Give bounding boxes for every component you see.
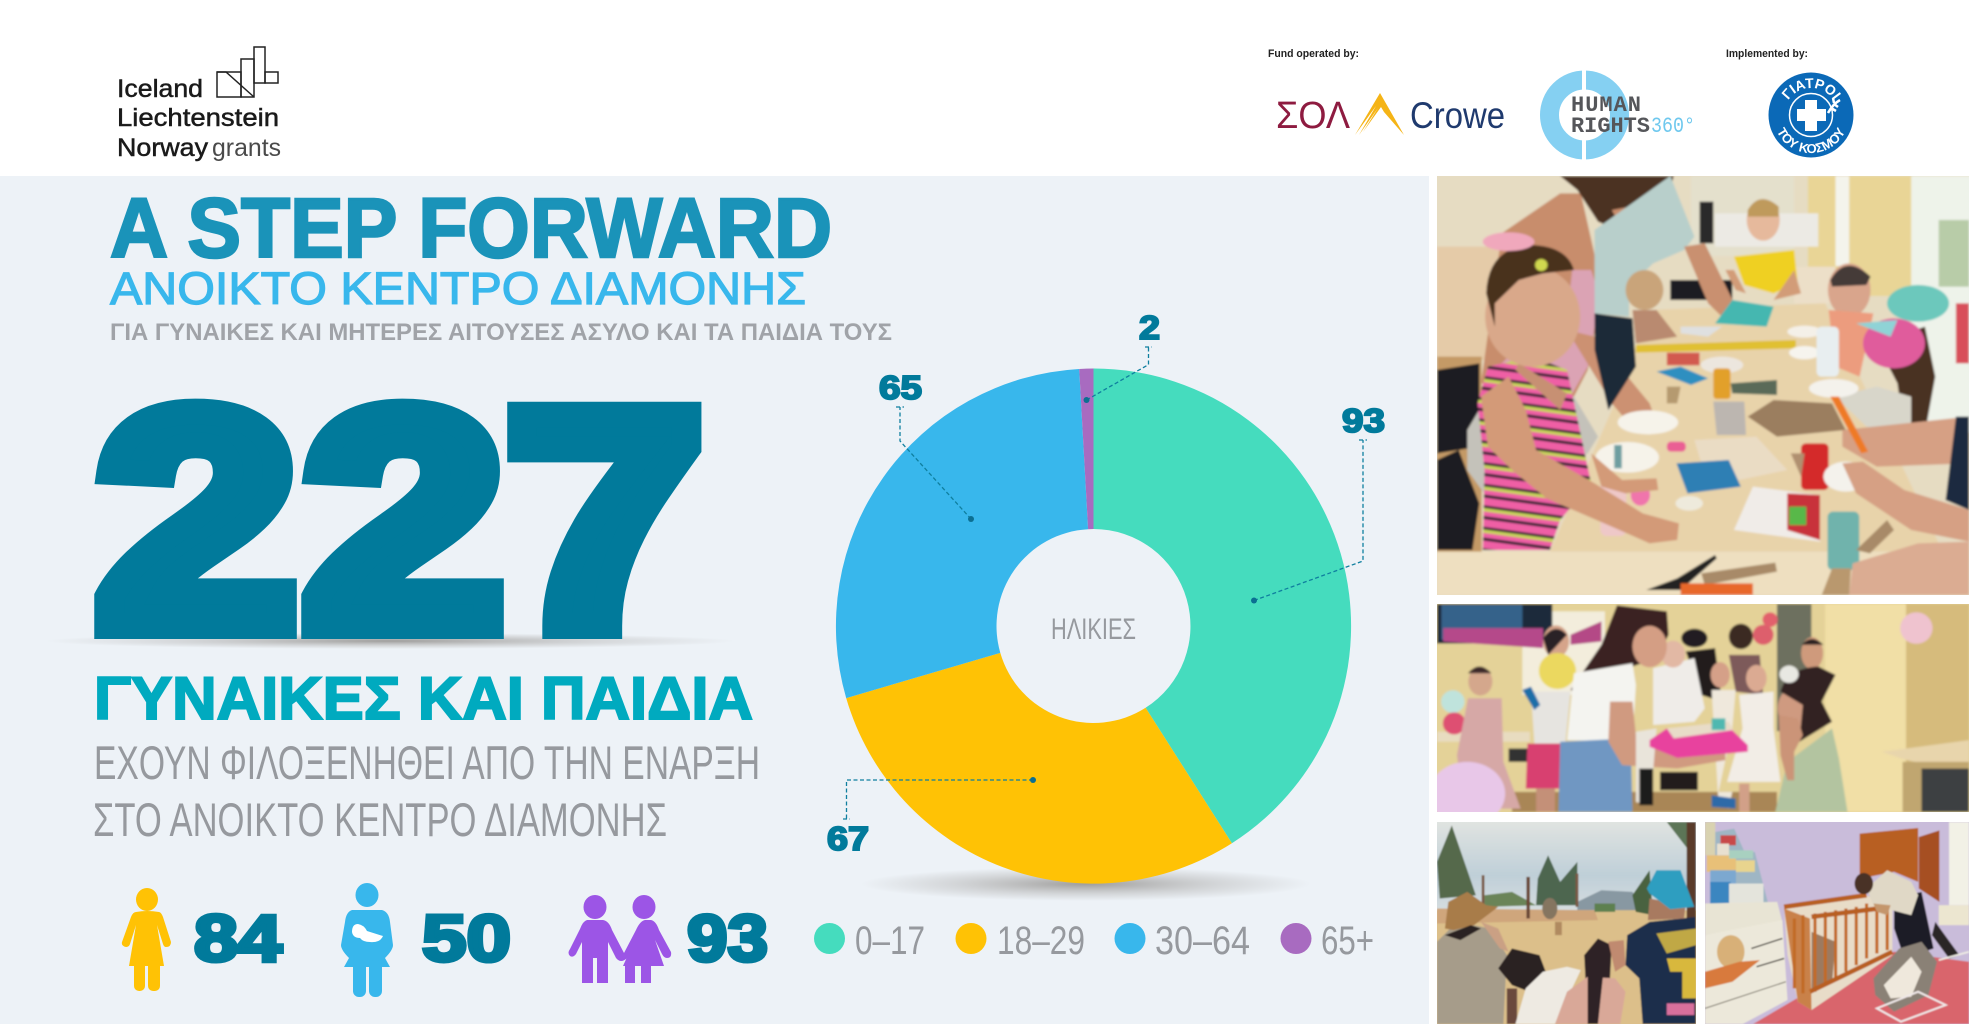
baby bouncer <box>1873 942 1937 1012</box>
logo: SOL Crowe <box>1276 93 1505 137</box>
logo: Human Rights 360: 360° <box>1651 114 1695 139</box>
donut chart: ages <box>836 368 1351 884</box>
logo: SOL Crowe: ΣΟΛ <box>1276 95 1351 137</box>
logo: Iceland Liechtenstein Norway grants <box>117 47 281 162</box>
callout: 65: 65 <box>879 369 922 406</box>
legend: 0–17 <box>855 919 925 963</box>
logo: Human Rights 360: HUMAN <box>1571 93 1641 118</box>
stat: children 93: 93 <box>687 901 768 975</box>
woman <box>1481 193 1600 397</box>
logo: Iceland Liechtenstein Norway grants: grants <box>212 134 281 162</box>
stat: mothers 50 <box>341 883 511 997</box>
callout: 2 <box>1084 309 1160 403</box>
logo: Iceland Liechtenstein Norway grants: Iceland <box>117 75 203 103</box>
description text: ΕΧΟΥΝ ΦΙΛΟΞΕΝΗΘΕΙ ΑΠΟ ΤΗΝ ΕΝΑΡΞΗ <box>94 736 760 789</box>
logo: Doctors of the World: ΤΟΥ ΚΟΣΜΟΥ <box>1778 126 1844 154</box>
legend: 18–29 <box>997 919 1085 963</box>
legend <box>814 919 1374 963</box>
stat: mothers 50: 50 <box>422 901 511 975</box>
fence and kids <box>1507 988 1517 1024</box>
stat: children 93 <box>568 895 768 983</box>
logo: Iceland Liechtenstein Norway grants: Norway <box>117 134 209 162</box>
boy with balloon <box>1531 692 1571 743</box>
man <box>1894 892 1934 958</box>
balloons <box>1441 690 1465 713</box>
left woman <box>1437 922 1507 1024</box>
dresser <box>1705 920 1788 1024</box>
legend: 65+ <box>1321 919 1374 963</box>
logo: Doctors of the World: ΓΙΑΤΡΟΙ <box>1781 78 1841 100</box>
stat: women 84: 84 <box>194 901 282 975</box>
photo: children crafting at a table <box>1437 176 1969 595</box>
tagline: ΓΙΑ ΓΥΝΑΙΚΕΣ ΚΑΙ ΜΗΤΕΡΕΣ ΑΙΤΟΥΣΕΣ ΑΣΥΛΟ ΚΑΙ ΤΑ ΠΑΙΔΙΑ ΤΟΥΣ <box>110 319 892 346</box>
shadow under donut <box>861 867 1311 901</box>
big number 227 <box>97 349 702 692</box>
big number 227: 2 <box>304 349 503 692</box>
cake <box>1667 722 1736 742</box>
icon: woman <box>122 888 171 991</box>
logo: SOL Crowe: Crowe <box>1410 95 1505 136</box>
stat: women 84 <box>122 888 282 991</box>
kids right <box>1828 263 1871 317</box>
photo: family visit to the zoo <box>1437 822 1696 1024</box>
white dress kids <box>1653 658 1705 725</box>
heading: women and children: ΓΥΝΑΙΚΕΣ ΚΑΙ ΠΑΙΔΙΑ <box>94 665 753 732</box>
logo: Human Rights 360: RIGHTS <box>1571 114 1650 139</box>
big number 227: 2 <box>97 349 296 692</box>
photo: nursery with crib <box>1705 822 1969 1024</box>
girl in striped dress <box>1478 357 1591 550</box>
girl with hands on face <box>1775 728 1848 812</box>
woman with cake <box>1571 605 1669 692</box>
callout: 2: 2 <box>1139 309 1160 346</box>
shelf of supplies <box>1705 822 1715 855</box>
table items <box>1636 340 1796 353</box>
shadow under big number <box>45 633 735 649</box>
title: A STEP FORWARD <box>110 181 832 275</box>
subtitle: ΑΝΟΙΚΤΟ ΚΕΝΤΡΟ ΔΙΑΜΟΝΗΣ <box>110 263 806 314</box>
logo: Iceland Liechtenstein Norway grants: Liechtenstein <box>117 104 279 132</box>
header label: implemented by: Implemented by: <box>1726 48 1808 60</box>
header label: fund operated by: Fund operated by: <box>1268 48 1359 60</box>
callout: 67: 67 <box>827 820 869 857</box>
left girl <box>1468 668 1492 696</box>
callout: 93: 93 <box>1342 402 1385 439</box>
man <box>1595 176 1694 317</box>
blond child <box>1626 270 1663 310</box>
people back <box>1729 624 1753 649</box>
chart center label: ΗΛΙΚΙΕΣ <box>1051 613 1136 646</box>
photo: birthday celebration <box>1437 604 1969 812</box>
boy in navy shirt <box>1625 917 1696 1024</box>
callout: 65 <box>879 369 974 522</box>
big number 227: 7 <box>507 349 702 692</box>
table <box>1550 303 1939 552</box>
icon: two children <box>568 895 671 983</box>
logo: Doctors of the World <box>1768 72 1854 158</box>
crib <box>1784 895 1892 1010</box>
icon: mother with baby <box>341 883 393 997</box>
description text <box>93 736 760 846</box>
callout: 67 <box>827 777 1036 857</box>
logo: Human Rights 360 <box>1550 66 1695 164</box>
background panel <box>0 176 1429 1024</box>
boy in yellow <box>1734 250 1798 293</box>
legend: 30–64 <box>1155 919 1250 963</box>
description text: ΣΤΟ ΑΝΟΙΚΤΟ ΚΕΝΤΡΟ ΔΙΑΜΟΝΗΣ <box>93 793 667 846</box>
callout: 93 <box>1251 402 1385 604</box>
